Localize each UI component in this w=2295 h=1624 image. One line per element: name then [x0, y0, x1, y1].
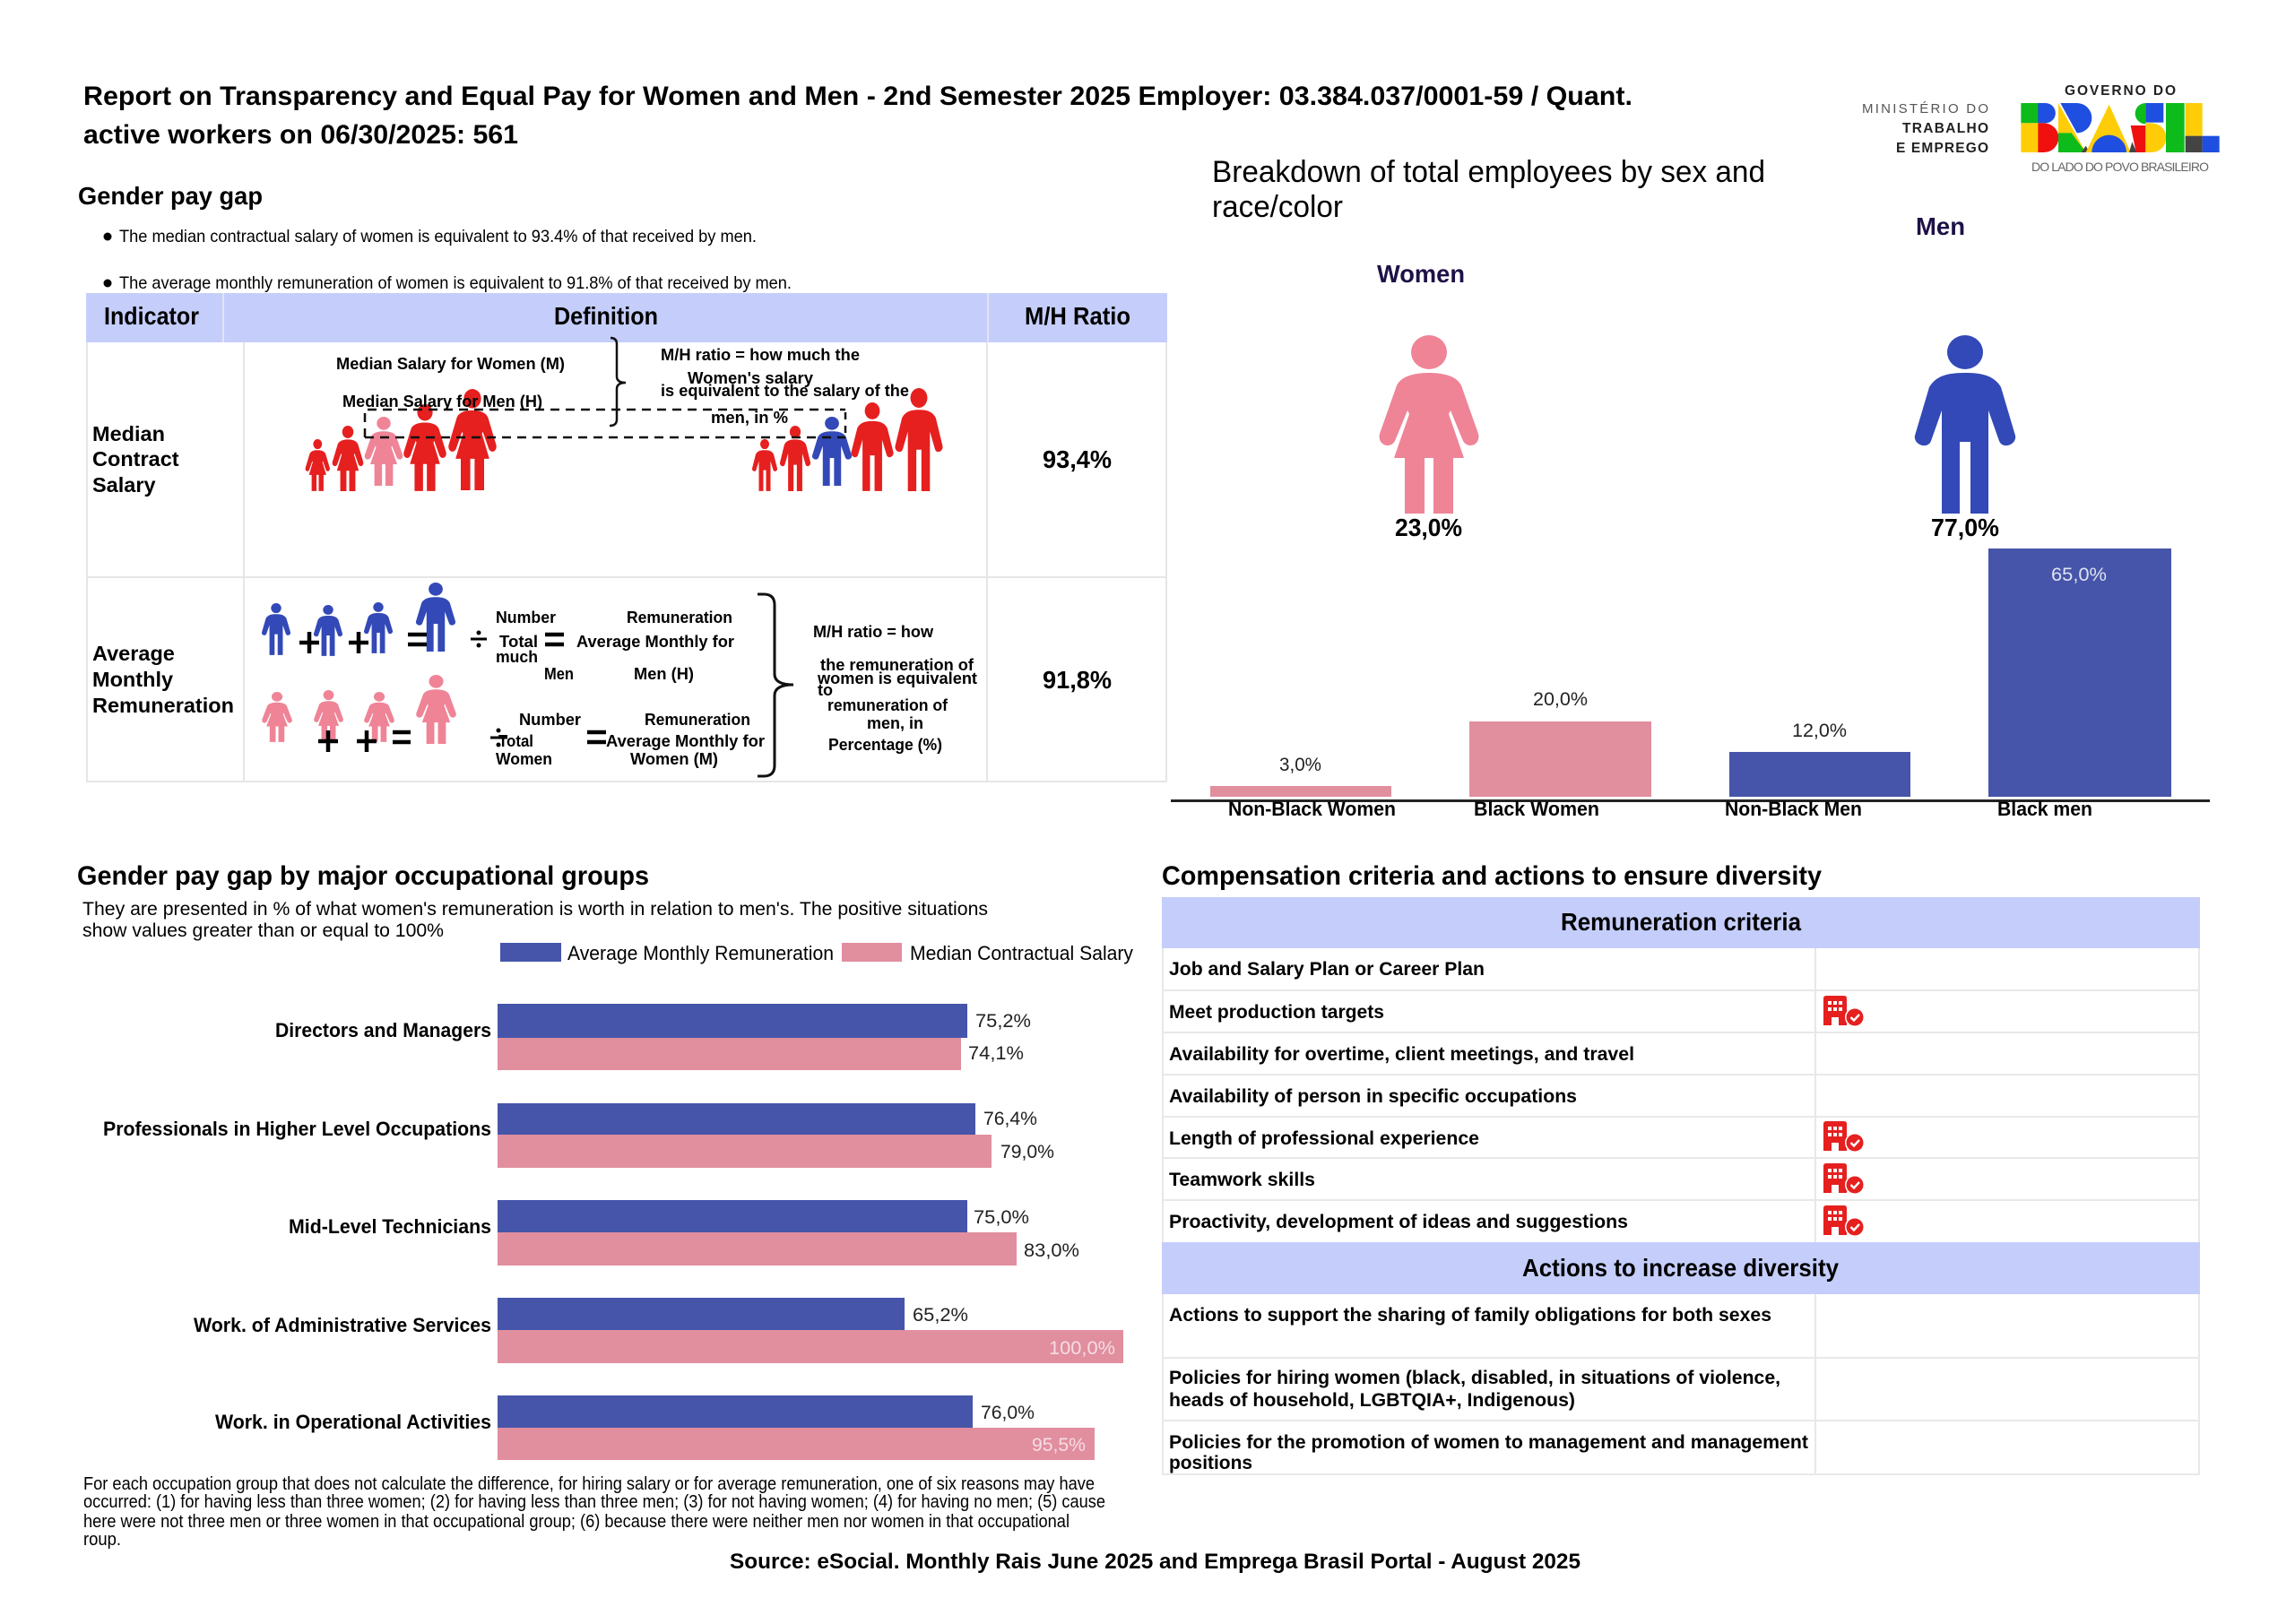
men formula text: Men (H) [634, 664, 694, 683]
group: directors and managers: Directors and Managers [275, 1019, 491, 1041]
table header [86, 293, 1167, 342]
value: 91,8%: 91,8% [1043, 666, 1112, 694]
men formula text: Remuneration [627, 608, 732, 626]
women formula text [496, 710, 765, 768]
description [82, 898, 988, 941]
heading: Gender pay gap by major occupational groups [77, 861, 649, 891]
table header: remuneration criteria: Remuneration criteria [1561, 908, 1802, 936]
row label: average monthly remuneration [92, 642, 234, 717]
ratio explanation: to [818, 680, 833, 699]
ratio explanation: the remuneration of [820, 655, 974, 674]
women formula text: Women [496, 749, 552, 768]
bar: non-black men: 12,0% [1792, 720, 1847, 741]
row label: average monthly remuneration: Average [92, 642, 175, 665]
row: teamwork skills: Teamwork skills [1169, 1169, 1315, 1190]
ratio explanation: men, in [867, 713, 923, 732]
diagram: median salary definition [306, 338, 943, 491]
title: Report on Transparency and Equal Pay for Women and Men - 2nd Semester 2025 Employer: 03.384.037/0001-59 / Quant. [83, 82, 1632, 111]
group: mid-level technicians [289, 1200, 1079, 1266]
category labels: Non-Black Men [1725, 798, 1862, 820]
row: production targets [1169, 996, 1865, 1027]
value: 93,4%: 93,4% [1043, 445, 1112, 473]
heading: gender pay gap: Gender pay gap [78, 182, 263, 210]
row: proactivity: Proactivity, development of ideas and suggestions [1169, 1211, 1628, 1232]
logo: ministry and government of Brazil: GOVERNO DO [2065, 83, 2176, 99]
category labels [1228, 798, 2092, 820]
men formula text: Men [544, 664, 574, 683]
group: directors and managers: 75,2% [975, 1010, 1031, 1032]
bar chart: race and sex [1171, 549, 2210, 820]
legend: Average Monthly Remuneration [567, 942, 834, 964]
bar: non-black women: 3,0% [1279, 754, 1321, 775]
row label: median contract salary: Median [92, 422, 165, 445]
bullet: average remuneration: The average monthly remuneration of women is equivalent to 91.8% of that received by men. [119, 273, 792, 293]
group: administrative services [194, 1298, 1123, 1363]
men formula text: Number [496, 608, 556, 626]
ratio explanation: men, in % [711, 408, 788, 427]
men formula text: Average Monthly for [576, 632, 734, 651]
women figures [306, 389, 497, 491]
group: directors and managers: 74,1% [968, 1042, 1024, 1064]
women formula text: Average Monthly for [606, 731, 765, 750]
row: promotion policies [1169, 1431, 1808, 1473]
footnote: occurred: (1) for having less than three women; (2) for having less than three men; (3) for not having women; (4) for having no men; (5) cause [83, 1492, 1105, 1512]
men formula text: Total [499, 632, 538, 651]
group: operational activities: 76,0% [981, 1402, 1035, 1423]
ratio explanation: Women's salary [688, 368, 814, 387]
bar: black men [1988, 549, 2171, 797]
ratio explanation: M/H ratio = how much the [661, 345, 860, 364]
row label: median contract salary [92, 422, 179, 497]
table header: actions to increase diversity: Actions to increase diversity [1522, 1254, 1840, 1282]
table header: M/H Ratio [1025, 302, 1130, 330]
heading: breakdown [1212, 155, 1765, 224]
group: professionals: 76,4% [983, 1108, 1037, 1129]
logo: ministry and government of Brazil: TRABALHO [1902, 121, 1988, 136]
group: administrative services: 65,2% [913, 1304, 968, 1326]
group: professionals: Professionals in Higher Level Occupations [103, 1118, 491, 1140]
group: operational activities [215, 1395, 1095, 1460]
category labels: Non-Black Women [1228, 798, 1396, 820]
diagram: average remuneration definition [262, 583, 977, 776]
logo: ministry and government of Brazil [1862, 83, 2220, 174]
footnote: For each occupation group that does not calculate the difference, for hiring salary or for average remuneration, one of six reasons may have [83, 1474, 1095, 1494]
table header: actions to increase diversity [1162, 1242, 2200, 1294]
label: women: Women [1377, 260, 1465, 288]
group: mid-level technicians: 83,0% [1024, 1240, 1079, 1261]
legend [500, 942, 1134, 964]
category labels: Black men [1997, 798, 2092, 820]
math operators [299, 632, 606, 752]
bar: black women: 20,0% [1533, 688, 1588, 710]
row: hiring policies: heads of household, LGBTQIA+, Indigenous) [1169, 1389, 1575, 1411]
row: teamwork skills [1169, 1163, 1865, 1195]
bullet: median salary: The median contractual salary of women is equivalent to 93.4% of that received by men. [119, 227, 757, 246]
label: men: Men [1916, 212, 1965, 240]
row: job and salary plan: Job and Salary Plan or Career Plan [1169, 958, 1485, 980]
group: professionals [103, 1103, 1054, 1168]
ratio explanation: Percentage (%) [828, 735, 942, 754]
title [83, 82, 1632, 150]
ratio explanation: women is equivalent [817, 669, 977, 687]
row: promotion policies: Policies for the promotion of women to management and management [1169, 1431, 1808, 1453]
salary labels [336, 354, 565, 410]
bar: black women [1469, 688, 1651, 797]
panel: compensation criteria and actions [1162, 861, 2200, 1475]
group: administrative services: 100,0% [1049, 1337, 1115, 1359]
brace [610, 338, 626, 426]
ratio explanation [661, 345, 909, 427]
salary labels: Median Salary for Women (M) [336, 354, 565, 373]
title: active workers on 06/30/2025: 561 [83, 120, 518, 150]
ratio explanation: M/H ratio = how [813, 622, 934, 641]
row: professional experience [1169, 1121, 1865, 1153]
category labels: Black Women [1474, 798, 1599, 820]
men figures [262, 583, 455, 656]
group: professionals: 79,0% [1000, 1141, 1054, 1162]
men formula text: much [496, 647, 538, 666]
bar: non-black women [1210, 754, 1391, 797]
table header: remuneration criteria [1162, 897, 2200, 948]
ratio explanation: is equivalent to the salary of the [661, 381, 909, 400]
panel: gender pay gap [78, 182, 1167, 782]
women formula text: Remuneration [645, 710, 750, 729]
row: availability of person: Availability of person in specific occupations [1169, 1085, 1577, 1107]
row label: average monthly remuneration: Remuneration [92, 694, 234, 717]
group: administrative services: Work. of Administrative Services [194, 1314, 491, 1336]
logo: ministry and government of Brazil: E EMPREGO [1896, 141, 1988, 156]
salary labels: Median Salary for Men (H) [342, 392, 542, 410]
men formula text [496, 608, 734, 683]
group: operational activities: 95,5% [1032, 1434, 1086, 1456]
bar: black men: 65,0% [2051, 564, 2107, 585]
women formula text: Total [498, 731, 533, 750]
row: professional experience: Length of professional experience [1169, 1127, 1479, 1149]
bar: non-black men [1729, 720, 1910, 797]
row label: median contract salary: Contract [92, 447, 179, 471]
table header: Indicator [104, 302, 199, 330]
icon: man pictogram [1915, 335, 2015, 514]
bar chart: occupational groups [103, 1004, 1123, 1460]
row label: median contract salary: Salary [92, 473, 156, 497]
group: mid-level technicians: Mid-Level Technicians [289, 1215, 491, 1238]
row: availability for overtime: Availability for overtime, client meetings, and travel [1169, 1043, 1634, 1065]
footnote: here were not three men or three women in that occupational group; (6) because there were neither men nor women in that occupational [83, 1512, 1070, 1532]
row: hiring policies: Policies for hiring women (black, disabled, in situations of violence, [1169, 1367, 1780, 1388]
row label: average monthly remuneration: Monthly [92, 668, 173, 691]
group: directors and managers [275, 1004, 1031, 1070]
footnote: roup. [83, 1530, 121, 1550]
ratio explanation [813, 622, 977, 754]
footnote [83, 1474, 1105, 1550]
brace [758, 594, 793, 776]
logo: ministry and government of Brazil: DO LADO DO POVO BRASILEIRO [2031, 160, 2209, 174]
women formula text: Women (M) [630, 749, 718, 768]
table header: Definition [554, 302, 658, 330]
row: production targets: Meet production targets [1169, 1001, 1384, 1023]
row: family obligations: Actions to support the sharing of family obligations for both sexes [1169, 1304, 1771, 1326]
value: women share: 23,0% [1395, 514, 1462, 541]
description: show values greater than or equal to 100% [82, 920, 444, 941]
men figures [752, 388, 943, 491]
heading: breakdown: race/color [1212, 190, 1343, 224]
women formula text: Number [519, 710, 581, 729]
row: proactivity [1169, 1205, 1865, 1237]
value: men share: 77,0% [1931, 514, 1999, 541]
source line: Source: eSocial. Monthly Rais June 2025 and Emprega Brasil Portal - August 2025 [730, 1550, 1581, 1574]
logo: ministry and government of Brazil: MINISTÉRIO DO [1862, 101, 1988, 117]
row: promotion policies: positions [1169, 1452, 1252, 1473]
description: They are presented in % of what women's remuneration is worth in relation to men's. The positive situations [82, 898, 988, 920]
panel: breakdown by sex and race/color [1171, 155, 2210, 820]
panel: gender pay gap by occupational groups [77, 861, 1134, 1550]
row: hiring policies [1169, 1367, 1780, 1411]
icon: woman pictogram [1380, 335, 1478, 514]
women figures [262, 675, 456, 744]
group: mid-level technicians: 75,0% [974, 1206, 1029, 1228]
group: operational activities: Work. in Operational Activities [215, 1411, 491, 1433]
table: indicators [86, 293, 1167, 782]
ratio explanation: remuneration of [827, 695, 948, 714]
legend: Median Contractual Salary [910, 942, 1134, 964]
heading: breakdown: Breakdown of total employees by sex and [1212, 155, 1765, 189]
heading: Compensation criteria and actions to ensure diversity [1162, 861, 1823, 891]
